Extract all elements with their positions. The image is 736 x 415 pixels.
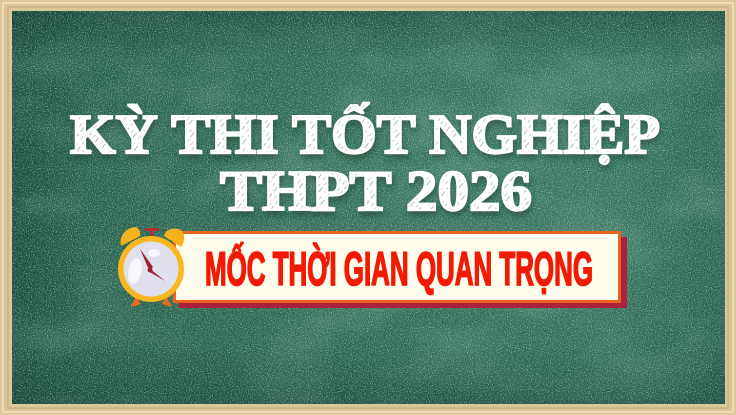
face highlights xyxy=(126,257,144,285)
title line 2: THPT 2026 xyxy=(220,160,532,223)
left bell xyxy=(120,227,140,246)
banner: key milestones xyxy=(174,232,627,308)
clock hands xyxy=(140,249,165,281)
title: chalk lettering xyxy=(70,102,660,223)
title line 1: KỲ THI TỐT NGHIỆP xyxy=(70,102,660,166)
icon: alarm clock xyxy=(118,227,184,307)
clock feet xyxy=(131,296,172,307)
clock body xyxy=(118,236,184,302)
right bell xyxy=(164,229,184,247)
clock top handle xyxy=(145,228,159,238)
